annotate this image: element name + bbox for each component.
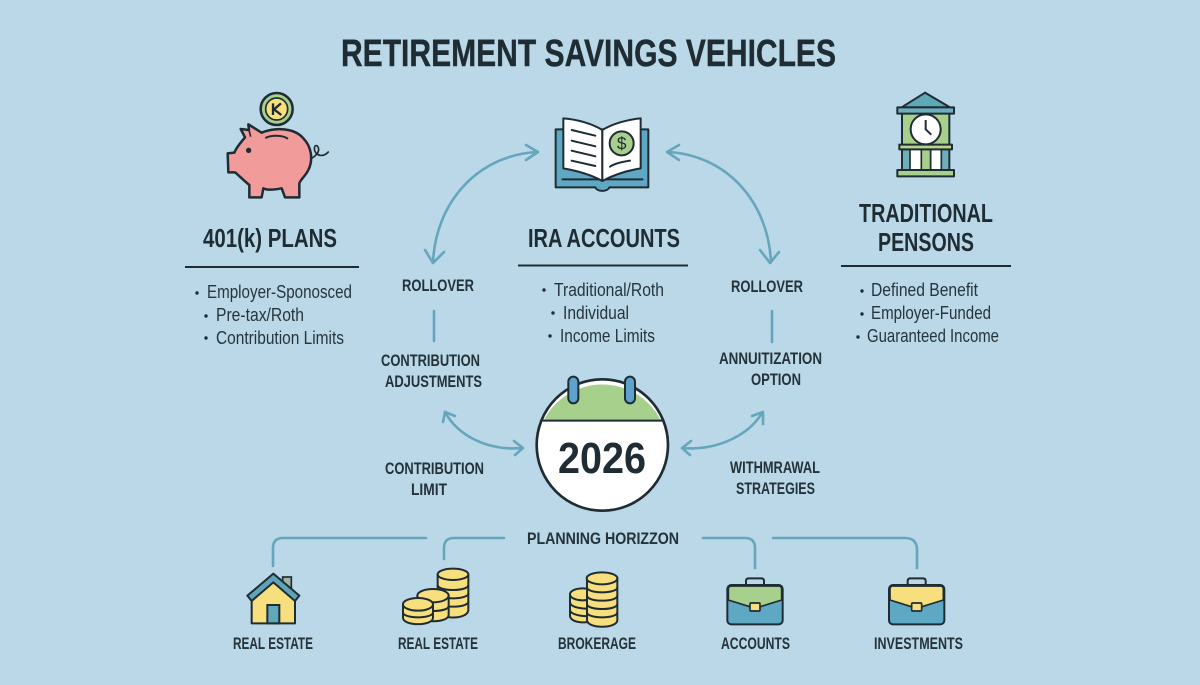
arrow: IRA to 401(k) rollover: [425, 145, 538, 263]
icon: coin stack: [570, 572, 617, 627]
list: 401(k) features: Pre-tax/Roth: [216, 305, 304, 325]
icon: open book with dollar: [556, 118, 648, 191]
item: investments: [874, 578, 963, 653]
list: 401(k) features: Employer-Sponosced: [207, 282, 352, 302]
divider: IRA: [518, 264, 688, 266]
label: withdrawal strategies: STRATEGIES: [736, 479, 815, 498]
icon: bank building with clock: [897, 93, 954, 176]
item: real estate house: [233, 574, 313, 653]
icon: house: [247, 574, 299, 623]
caption: ACCOUNTS: [721, 634, 790, 653]
arrow: calendar to contribution adjustments: [443, 412, 523, 455]
icon: yellow briefcase: [889, 578, 944, 624]
caption: REAL ESTATE: [233, 634, 313, 653]
connector: to investments: [773, 538, 917, 568]
item: brokerage: [558, 572, 636, 653]
list: pension features: Guaranteed Income: [867, 326, 999, 346]
label: contribution adjustments: ADJUSTMENTS: [385, 372, 482, 391]
label: contribution limit: [385, 459, 484, 499]
label: contribution limit: CONTRIBUTION: [385, 459, 484, 478]
arrow: IRA to pensions rollover: [667, 145, 779, 263]
list: pension features: Employer-Funded: [871, 303, 991, 323]
list: pension features: Defined Benefit: [871, 280, 978, 300]
caption: BROKERAGE: [558, 634, 636, 653]
connector: to real estate house: [273, 538, 426, 566]
arrow: calendar to annuitization: [682, 412, 763, 455]
caption: REAL ESTATE: [398, 634, 478, 653]
list: pension features: [856, 280, 999, 346]
label: annuitization option: [719, 349, 822, 389]
label: contribution limit: LIMIT: [411, 480, 447, 499]
divider: 401(k): [185, 266, 359, 268]
label: rollover left: ROLLOVER: [402, 276, 474, 295]
list: 401(k) features: Contribution Limits: [216, 328, 344, 348]
icon: open book with dollar: $: [617, 133, 627, 153]
divider: pensions: [841, 265, 1011, 267]
heading: 401(k) plans: 401(k) PLANS: [203, 225, 337, 253]
label: rollover right: ROLLOVER: [731, 277, 803, 296]
list: IRA features: Income Limits: [560, 326, 655, 346]
list: IRA features: Traditional/Roth: [554, 280, 664, 300]
icon: piggy bank with coin: [228, 93, 328, 197]
heading: traditional pensions: PENSONS: [878, 229, 974, 257]
heading: IRA accounts: IRA ACCOUNTS: [528, 225, 680, 253]
label: withdrawal strategies: WITHMRAWAL: [730, 458, 820, 477]
list: 401(k) features: [195, 282, 352, 348]
caption: INVESTMENTS: [874, 634, 963, 653]
panel: traditional pensions: [841, 93, 1011, 346]
connector: to coins: [444, 538, 504, 559]
title: RETIREMENT SAVINGS VEHICLES: [341, 33, 836, 75]
panel: IRA accounts: [518, 118, 688, 346]
connector: left vertical: [433, 311, 435, 341]
heading: traditional pensions: TRADITIONAL: [859, 200, 993, 228]
connector: to accounts: [703, 538, 755, 568]
calendar year: 2026: [558, 434, 646, 483]
list: IRA features: [542, 280, 664, 346]
item: accounts: [721, 578, 790, 653]
panel: 401(k) plans: [185, 93, 359, 348]
icon: green briefcase: [727, 578, 783, 624]
label: withdrawal strategies: [730, 458, 820, 498]
label: contribution adjustments: CONTRIBUTION: [381, 351, 480, 370]
label: planning horizon: PLANNING HORIZZON: [527, 529, 679, 548]
icon: coin stacks: [403, 569, 468, 624]
list: IRA features: Individual: [563, 303, 629, 323]
item: real estate coins: [398, 569, 478, 653]
label: annuitization option: OPTION: [751, 370, 801, 389]
connector: right vertical: [771, 311, 773, 342]
icon: 2026 calendar: [537, 377, 668, 511]
label: contribution adjustments: [381, 351, 482, 391]
label: annuitization option: ANNUITIZATION: [719, 349, 822, 368]
heading: traditional pensions: [859, 200, 993, 257]
